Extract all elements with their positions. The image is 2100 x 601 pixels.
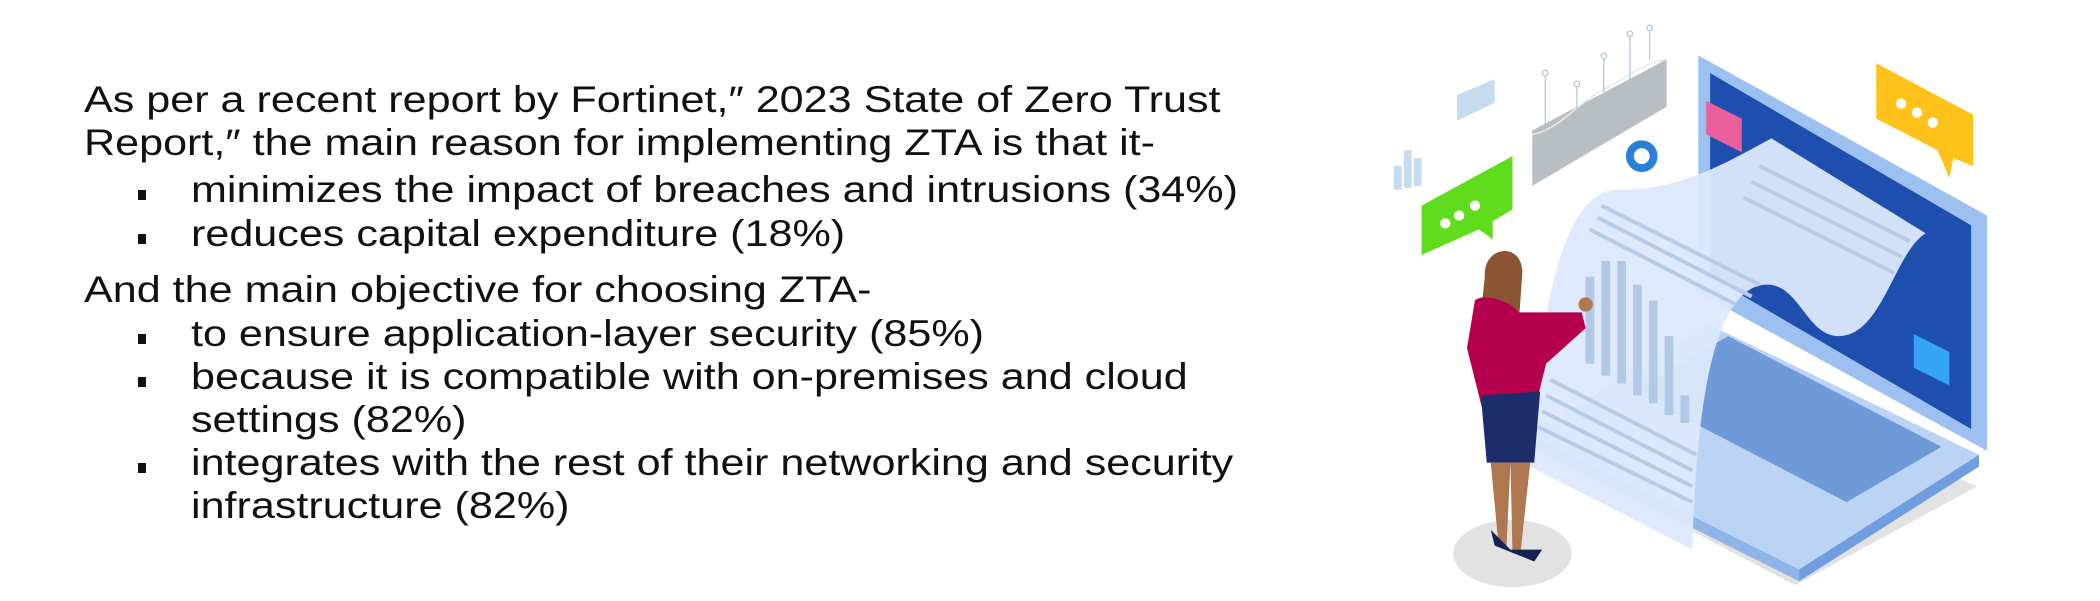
laptop base [1530,324,1979,581]
floor shadows [1453,380,1977,587]
laptop screen [1698,55,1987,451]
list: objectives: to ensure application-layer security (85%) [191,313,984,354]
paper scroll [1530,138,1926,550]
list: reasons [138,169,1238,254]
list: objectives: integrates with the rest of their networking and security [191,442,1233,483]
heading: objectives: And the main objective for choosing ZTA- [84,269,871,310]
illustration: woman reading document from laptop [1394,24,1987,587]
text block: intro: Report,″ the main reason for implementing ZTA is that it- [84,122,1155,163]
icon: donut [1630,144,1654,168]
list: objectives: infrastructure (82%) [191,485,569,526]
text block: intro [84,79,1221,163]
list: objectives: because it is compatible with on-premises and cloud [191,356,1188,397]
icon: faint bars and map [1394,79,1495,190]
icon: orange chat bubble [1876,63,1973,178]
icon: blue square [1914,334,1949,386]
list: reasons: minimizes the impact of breaches and intrusions (34%) [191,169,1238,210]
chart panel [1532,25,1667,186]
list: objectives [138,313,1234,526]
icon: green chat bubble [1422,156,1512,255]
icon: pink square [1706,101,1742,152]
list: reasons: reduces capital expenditure (18%) [191,213,845,254]
list: objectives: settings (82%) [191,399,467,440]
text block: intro: As per a recent report by Fortinet,″ 2023 State of Zero Trust [84,79,1221,120]
woman [1467,251,1593,561]
